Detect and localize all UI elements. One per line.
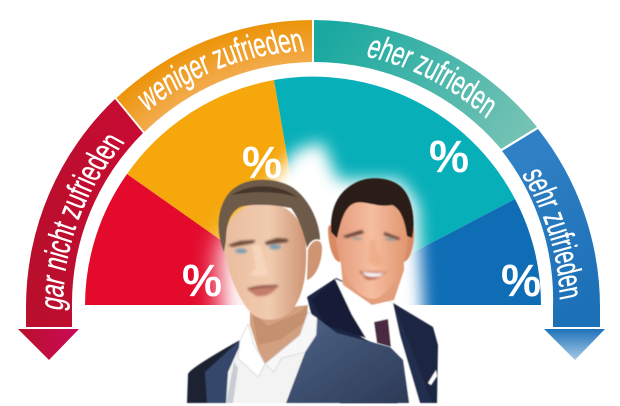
pie chart: satisfaction sectors — [85, 77, 541, 330]
white glow behind portraits — [218, 142, 424, 330]
portrait: man on the right — [307, 178, 438, 403]
sector: sehr zufrieden — [313, 199, 541, 305]
band segment: eher zufrieden: eher zufrieden — [368, 36, 495, 118]
sector: weniger zufrieden — [127, 80, 313, 305]
sector: eher zufrieden — [274, 77, 515, 305]
arrow: left down — [18, 329, 79, 360]
percent label: gar nicht zufrieden: % — [182, 255, 222, 306]
percent label: sehr zufrieden: % — [501, 255, 541, 306]
band segment: sehr zufrieden — [502, 129, 600, 327]
band segment: gar nicht zufrieden — [26, 99, 143, 327]
band segment: sehr zufrieden: sehr zufrieden — [522, 169, 582, 300]
band segment: weniger zufrieden: weniger zufrieden — [138, 30, 304, 111]
band segment: gar nicht zufrieden: gar nicht zufrieden — [44, 135, 125, 310]
percent label: weniger zufrieden: % — [242, 137, 282, 188]
percent label: eher zufrieden: % — [429, 131, 469, 182]
portrait: man on the left — [187, 180, 409, 403]
sector: gar nicht zufrieden — [85, 174, 313, 305]
arrow: right down — [544, 329, 605, 360]
band segment: eher zufrieden — [314, 20, 537, 149]
scale band — [26, 20, 600, 327]
